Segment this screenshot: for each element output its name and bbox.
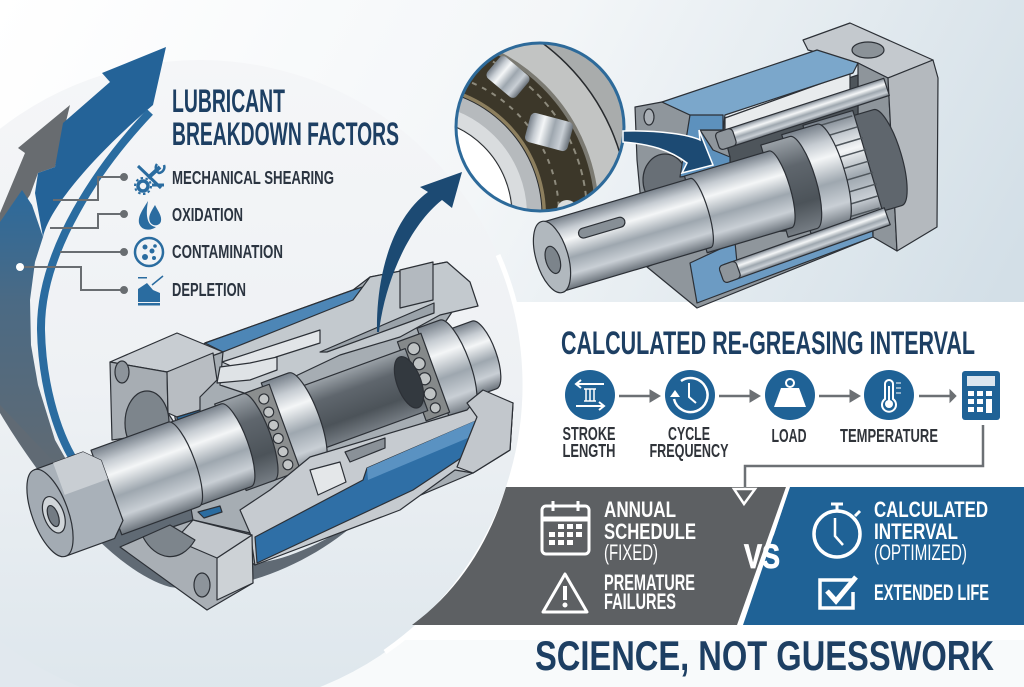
- annual text: (FIXED): [604, 540, 658, 565]
- grey crescent band: [0, 400, 368, 589]
- housing backing: [167, 262, 513, 565]
- bearing rollers: [486, 56, 530, 98]
- factor labels: CONTAMINATION: [172, 242, 283, 262]
- lower page band: [300, 640, 1024, 687]
- heading: lubricant breakdown factors: [172, 83, 399, 152]
- icon: temperature: [864, 370, 914, 420]
- factor labels: [172, 168, 334, 300]
- calculated text: CALCULATED: [874, 497, 988, 522]
- lower wall roller: [310, 462, 346, 495]
- white lower right panel: [300, 302, 1024, 687]
- factor labels: OXIDATION: [172, 205, 243, 225]
- upper tie rod: [715, 78, 889, 150]
- connector lines: [16, 174, 127, 293]
- icon: stopwatch: [814, 504, 860, 557]
- icon: cycle frequency: [665, 370, 715, 420]
- icon: contamination circle: [135, 238, 163, 266]
- parameter labels: TEMPERATURE: [840, 426, 938, 446]
- vs divider: VS: [744, 538, 780, 576]
- blue top wall: [662, 50, 858, 130]
- icon: oil drops: [139, 201, 161, 230]
- upper roller: [217, 357, 277, 383]
- left flange: [635, 102, 730, 267]
- bearing detail inset: [454, 42, 626, 212]
- swoosh arrows: [0, 47, 368, 589]
- annual text: FAILURES: [604, 589, 676, 614]
- parameter labels: STROKE: [562, 424, 616, 444]
- lower blue wall: [255, 420, 478, 563]
- panel: annual schedule: [412, 487, 786, 625]
- left shaft: [17, 398, 263, 562]
- parameter labels: LOAD: [772, 426, 806, 446]
- lower slate band: [0, 190, 72, 470]
- factor labels: DEPLETION: [172, 280, 246, 300]
- vs divider: [740, 487, 788, 625]
- icon: calculator: [962, 371, 1000, 420]
- large background disc: [0, 60, 525, 687]
- shaft: [684, 148, 801, 253]
- lower left flange: [120, 520, 253, 610]
- parameter labels: [562, 424, 938, 461]
- seal blue lower: [198, 506, 222, 518]
- lower left background tint: [0, 560, 220, 687]
- upper housing wall: [220, 262, 478, 395]
- icon: wrench and gear: [135, 164, 164, 194]
- parameter labels: LENGTH: [562, 441, 616, 461]
- lower flange and blue wall: [647, 225, 873, 308]
- calculated text: INTERVAL: [874, 519, 958, 544]
- icon: checkbox: [820, 577, 856, 608]
- thin blue arc: [41, 112, 150, 462]
- annual text: SCHEDULE: [604, 519, 696, 544]
- lower right flange: [457, 390, 513, 473]
- parameter labels: FREQUENCY: [650, 441, 728, 461]
- parameter labels: CYCLE: [668, 424, 710, 444]
- top blue strip: [205, 272, 418, 352]
- top flange: [110, 333, 223, 372]
- curved arrow to bearing detail: [377, 172, 462, 332]
- port hole: [852, 42, 884, 58]
- upper wall details: [222, 330, 320, 372]
- arrow from inset to bearing: [623, 130, 713, 173]
- heading: lubricant breakdown factors: BREAKDOWN FACTORS: [172, 116, 399, 152]
- calculated text: [874, 497, 989, 605]
- disc rim: [385, 255, 525, 652]
- seal blue top: [177, 410, 200, 425]
- lower tie rod: [718, 208, 890, 283]
- heading: lubricant breakdown factors: LUBRICANT: [172, 83, 285, 119]
- grey arrow: [0, 105, 70, 240]
- annual text: PREMATURE: [604, 570, 695, 595]
- gear and bearings: [521, 101, 917, 314]
- lower blue highlight panel: [367, 420, 477, 480]
- left actuator cutaway: [17, 262, 513, 610]
- end block: [803, 23, 933, 78]
- icon: stroke length: [565, 370, 615, 420]
- right actuator cutaway: [521, 23, 938, 314]
- inner sleeve and bearings: [213, 304, 513, 494]
- calculated text: (OPTIMIZED): [874, 540, 967, 565]
- icon: load weight: [765, 370, 815, 420]
- annual text: [604, 497, 696, 614]
- icon: warning triangle: [543, 574, 587, 612]
- annual text: ANNUAL: [604, 497, 676, 522]
- lower housing wall: [240, 395, 513, 565]
- flow arrows: [619, 390, 956, 402]
- panel: calculated interval: [743, 487, 1024, 625]
- icon: calendar: [542, 501, 589, 554]
- icon: depletion gauge: [138, 276, 163, 306]
- blue arrow: [35, 47, 166, 237]
- inner dark cavity: [700, 75, 858, 290]
- flow connector from calculator to comparison: [734, 425, 983, 504]
- factor labels: MECHANICAL SHEARING: [172, 168, 334, 188]
